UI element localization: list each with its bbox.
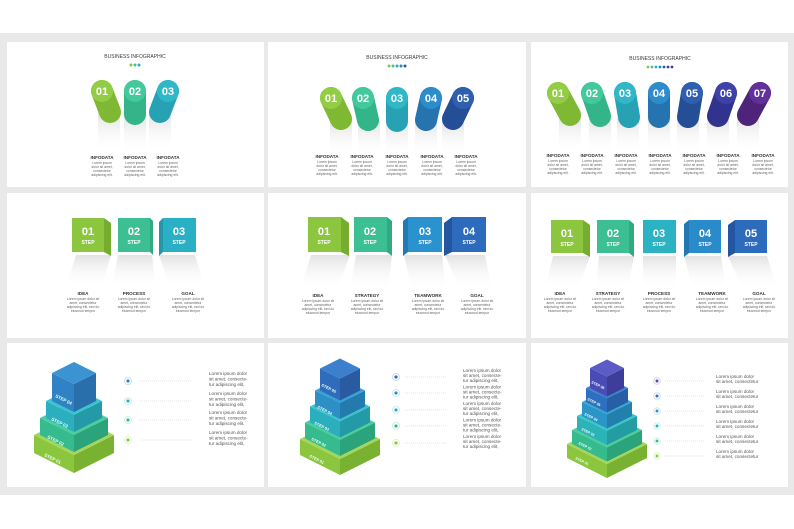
- pyramid: STEP 03: [581, 427, 595, 437]
- labels: Lorem ipsum: [92, 161, 112, 165]
- cylinders: 02: [586, 88, 598, 100]
- bullet list: tur adipiscing elit,: [209, 382, 244, 387]
- labels: dolor sit amet,: [316, 164, 338, 168]
- bullet list: Lorem ipsum dolor: [716, 419, 755, 424]
- labels: [302, 293, 493, 315]
- bullet list: Lorem ipsum dolor: [209, 430, 248, 435]
- labels: consectetur: [549, 167, 568, 171]
- labels: Lorem ipsum dolor sit: [118, 297, 150, 301]
- labels: GOAL: [181, 291, 195, 296]
- labels: Lorem ipsum: [352, 160, 372, 164]
- labels: Lorem ipsum dolor sit: [696, 297, 728, 301]
- cube 03: STEP: [172, 240, 186, 246]
- dots: [388, 64, 406, 68]
- cubes: STEP: [698, 242, 712, 248]
- bullet list: sit amet, consectetur: [716, 454, 759, 459]
- labels: [90, 155, 180, 177]
- cube 04: [444, 217, 492, 290]
- bullet list: tur adipiscing elit,: [463, 378, 498, 383]
- bullet list: Lorem ipsum dolor: [716, 374, 755, 379]
- cubes: STEP: [744, 242, 758, 248]
- cube 01: STEP: [317, 240, 331, 246]
- labels: adipiscing elit.: [316, 172, 338, 176]
- labels: dolor sit amet,: [157, 165, 179, 169]
- labels: Lorem ipsum dolor sit: [461, 299, 493, 303]
- labels: amet, consectetur: [70, 301, 97, 305]
- labels: amet, consectetur: [646, 301, 673, 305]
- labels: amet, consectetur: [175, 301, 202, 305]
- labels: consectetur: [353, 168, 372, 172]
- labels: eiusmod tempor: [465, 311, 490, 315]
- labels: consectetur: [126, 169, 145, 173]
- labels: INFODATA: [90, 155, 114, 160]
- bullet list: tur adipiscing elit,: [209, 441, 244, 446]
- bullet list: sit amet, consectetur: [716, 424, 759, 429]
- labels: TEAMWORK: [698, 291, 726, 296]
- pyramid: STEP 04: [584, 412, 598, 422]
- slide 6: 5 step cubes: [531, 193, 788, 338]
- labels: adipiscing elit, sed do: [643, 305, 675, 309]
- labels: Lorem ipsum dolor sit: [67, 297, 99, 301]
- cube 02: [350, 217, 392, 290]
- cube 02: STEP: [127, 240, 141, 246]
- cylinders: 01: [325, 93, 337, 105]
- bullet list: Lorem ipsum dolor: [209, 410, 248, 415]
- labels: adipiscing elit.: [615, 171, 637, 175]
- title: BUSINESS INFOGRAPHIC: [629, 56, 691, 62]
- labels: Lorem ipsum dolor sit: [544, 297, 576, 301]
- cylinder 01: [91, 80, 120, 153]
- labels: adipiscing elit.: [455, 172, 477, 176]
- labels: consectetur: [318, 168, 337, 172]
- labels: TEAMWORK: [414, 293, 442, 298]
- labels: consectetur: [159, 169, 178, 173]
- labels: eiusmod tempor: [306, 311, 331, 315]
- labels: INFODATA: [716, 153, 740, 158]
- labels: Lorem ipsum: [387, 160, 407, 164]
- labels: Lorem ipsum: [753, 159, 773, 163]
- labels: consectetur: [685, 167, 704, 171]
- labels: adipiscing elit.: [581, 171, 603, 175]
- labels: dolor sit amet,: [649, 163, 671, 167]
- bullet list: sit amet, consecte-: [209, 396, 248, 402]
- labels: INFODATA: [385, 154, 409, 159]
- bullet list: tur adipiscing elit,: [209, 402, 244, 407]
- labels: adipiscing elit, sed do: [118, 305, 150, 309]
- dots: [647, 66, 673, 68]
- bullet list: Lorem ipsum dolor: [463, 401, 502, 406]
- labels: eiusmod tempor: [747, 309, 772, 313]
- labels: amet, consectetur: [547, 301, 574, 305]
- labels: Lorem ipsum: [684, 159, 704, 163]
- labels: INFODATA: [420, 154, 444, 159]
- bullet list: sit amet, consectetur: [716, 394, 759, 399]
- bullet list: Lorem ipsum dolor: [463, 434, 502, 439]
- cylinders: 06: [720, 88, 732, 100]
- pyramid: STEP 02: [311, 436, 328, 448]
- labels: [544, 291, 775, 313]
- pyramid: STEP 05: [587, 397, 601, 407]
- cube 03: [403, 217, 446, 290]
- pyramid: STEP 01: [309, 453, 326, 465]
- labels: dolor sit amet,: [421, 164, 443, 168]
- cube 03: STEP: [418, 240, 432, 246]
- labels: eiusmod tempor: [416, 311, 441, 315]
- slide 1: 3 cylinders: [7, 42, 264, 187]
- bullet list: Lorem ipsum dolor: [463, 384, 502, 390]
- cubes: 02: [607, 228, 619, 240]
- bullet list: tur adipiscing elit,: [463, 411, 498, 416]
- labels: consectetur: [617, 167, 636, 171]
- labels: dolor sit amet,: [752, 163, 774, 167]
- bullet list: Lorem ipsum dolor: [209, 391, 248, 396]
- labels: Lorem ipsum: [616, 159, 636, 163]
- labels: adipiscing elit, sed do: [461, 307, 493, 311]
- labels: amet, consectetur: [464, 303, 491, 307]
- labels: consectetur: [754, 167, 773, 171]
- labels: adipiscing elit, sed do: [67, 305, 99, 309]
- slide 5: 4 step cubes: [268, 193, 526, 338]
- labels: dolor sit amet,: [717, 163, 739, 167]
- slide 7: 4-step pyramid: [7, 343, 264, 487]
- labels: Lorem ipsum dolor sit: [643, 297, 675, 301]
- labels: eiusmod tempor: [176, 309, 201, 313]
- labels: INFODATA: [751, 153, 775, 158]
- labels: IDEA: [78, 291, 89, 296]
- labels: adipiscing elit, sed do: [696, 305, 728, 309]
- labels: adipiscing elit, sed do: [351, 307, 383, 311]
- slide 3: 7 cylinders: [531, 42, 788, 187]
- labels: INFODATA: [682, 153, 706, 158]
- bullet list: sit amet, consecte-: [463, 390, 502, 394]
- pyramid: STEP 04: [317, 404, 334, 416]
- cylinders: 05: [457, 93, 469, 105]
- labels: eiusmod tempor: [122, 309, 147, 313]
- cubes: 04: [699, 228, 712, 240]
- labels: adipiscing elit, sed do: [544, 305, 576, 309]
- labels: Lorem ipsum: [548, 159, 568, 163]
- labels: PROCESS: [648, 291, 670, 296]
- labels: adipiscing elit.: [717, 171, 739, 175]
- labels: adipiscing elit.: [752, 171, 774, 175]
- labels: amet, consectetur: [121, 301, 148, 305]
- labels: dolor sit amet,: [683, 163, 705, 167]
- labels: eiusmod tempor: [700, 309, 725, 313]
- labels: dolor sit amet,: [91, 165, 113, 169]
- cubes: 03: [653, 228, 665, 240]
- labels: [315, 154, 478, 176]
- labels: Lorem ipsum: [125, 161, 145, 165]
- labels: amet, consectetur: [415, 303, 442, 307]
- bullet list: [124, 371, 248, 446]
- labels: amet, consectetur: [354, 303, 381, 307]
- labels: dolor sit amet,: [386, 164, 408, 168]
- labels: INFODATA: [123, 155, 147, 160]
- labels: Lorem ipsum: [158, 161, 178, 165]
- cylinders: [547, 82, 771, 154]
- cylinders: 03: [391, 93, 403, 105]
- labels: adipiscing elit.: [547, 171, 569, 175]
- bullet list: sit amet, consectetur: [716, 439, 759, 444]
- labels: INFODATA: [156, 155, 180, 160]
- labels: eiusmod tempor: [71, 309, 96, 313]
- labels: dolor sit amet,: [615, 163, 637, 167]
- labels: adipiscing elit.: [157, 173, 179, 177]
- bullet list: [654, 374, 759, 459]
- labels: dolor sit amet,: [547, 163, 569, 167]
- cubes: STEP: [652, 242, 666, 248]
- labels: amet, consectetur: [595, 301, 622, 305]
- labels: Lorem ipsum: [582, 159, 602, 163]
- slide 8: 5-step pyramid: [268, 343, 526, 487]
- cube 04: STEP: [462, 240, 476, 246]
- bullet list: Lorem ipsum dolor: [716, 449, 755, 454]
- pyramid: STEP 01: [44, 452, 62, 465]
- bullet list: sit amet, consecte-: [209, 436, 248, 440]
- bullet list: tur adipiscing elit,: [463, 428, 498, 432]
- bullet list: sit amet, consecte-: [463, 439, 502, 444]
- labels: Lorem ipsum: [422, 160, 442, 164]
- labels: STRATEGY: [596, 291, 620, 296]
- cube 01: [66, 218, 111, 288]
- labels: dolor sit amet,: [351, 164, 373, 168]
- cube 01: STEP: [81, 240, 95, 246]
- cube 04: 04: [463, 226, 476, 238]
- pyramid: STEP 01: [575, 456, 589, 466]
- bullet list: sit amet, consecte-: [209, 376, 248, 382]
- labels: [67, 291, 204, 313]
- slide 2: 5 cylinders: [268, 42, 526, 187]
- cylinders: 04: [425, 93, 438, 105]
- labels: consectetur: [423, 168, 442, 172]
- labels: STRATEGY: [355, 293, 379, 298]
- dots: [130, 64, 140, 66]
- labels: GOAL: [470, 293, 484, 298]
- labels: Lorem ipsum dolor sit: [172, 297, 204, 301]
- labels: adipiscing elit.: [351, 172, 373, 176]
- slide 4: 3 step cubes: [7, 193, 264, 338]
- pyramid: STEP 03: [51, 416, 69, 429]
- labels: adipiscing elit, sed do: [302, 307, 334, 311]
- bullet list: tur adipiscing elit,: [209, 421, 244, 426]
- labels: adipiscing elit, sed do: [743, 305, 775, 309]
- labels: Lorem ipsum: [456, 160, 476, 164]
- cylinder 03: [149, 80, 179, 153]
- title: BUSINESS INFOGRAPHIC: [366, 55, 428, 61]
- labels: consectetur: [93, 169, 112, 173]
- labels: INFODATA: [315, 154, 339, 159]
- cylinder 03: 03: [162, 86, 174, 98]
- pyramid: STEP 04: [55, 393, 73, 406]
- cylinders: 04: [653, 88, 666, 100]
- cylinders: 01: [552, 88, 564, 100]
- labels: dolor sit amet,: [455, 164, 477, 168]
- cylinders: 05: [686, 88, 698, 100]
- bullet list: Lorem ipsum dolor: [463, 368, 502, 373]
- cube 02: 02: [128, 226, 140, 238]
- cube 01: 01: [82, 226, 94, 238]
- labels: adipiscing elit, sed do: [172, 305, 204, 309]
- bullet list: sit amet, consectetur: [716, 379, 759, 384]
- title: BUSINESS INFOGRAPHIC: [104, 54, 166, 60]
- cylinders: 02: [357, 93, 369, 105]
- pyramid: [567, 360, 647, 478]
- labels: adipiscing elit.: [386, 172, 408, 176]
- labels: consectetur: [388, 168, 407, 172]
- cube 03: 03: [419, 226, 431, 238]
- labels: PROCESS: [123, 291, 145, 296]
- labels: amet, consectetur: [699, 301, 726, 305]
- bullet list: Lorem ipsum dolor: [463, 418, 502, 422]
- labels: INFODATA: [350, 154, 374, 159]
- labels: INFODATA: [648, 153, 672, 158]
- labels: consectetur: [583, 167, 602, 171]
- bullet list: sit amet, consectetur: [716, 409, 759, 414]
- labels: Lorem ipsum dolor sit: [351, 299, 383, 303]
- labels: eiusmod tempor: [548, 309, 573, 313]
- bullet list: Lorem ipsum dolor: [716, 434, 755, 439]
- bullet list: Lorem ipsum dolor: [209, 371, 248, 376]
- slide 9: 6-step pyramid: [531, 343, 788, 487]
- cylinders: 07: [754, 88, 766, 100]
- labels: INFODATA: [546, 153, 570, 158]
- cylinders: 03: [619, 88, 631, 100]
- labels: [546, 153, 775, 175]
- bullet list: sit amet, consecte-: [463, 373, 502, 378]
- bullet list: sit amet, consecte-: [463, 422, 502, 428]
- labels: adipiscing elit, sed do: [592, 305, 624, 309]
- bullet list: tur adipiscing elit,: [463, 444, 498, 449]
- bullet list: tur adipiscing elit,: [463, 394, 498, 400]
- pyramid: STEP 06: [591, 380, 605, 390]
- cylinders: [320, 87, 474, 158]
- cylinder 02: [124, 80, 146, 155]
- labels: dolor sit amet,: [581, 163, 603, 167]
- labels: amet, consectetur: [746, 301, 773, 305]
- cubes: STEP: [560, 242, 574, 248]
- labels: adipiscing elit.: [124, 173, 146, 177]
- labels: consectetur: [457, 168, 476, 172]
- pyramid: STEP 02: [47, 434, 65, 447]
- bullet list: sit amet, consecte-: [209, 416, 248, 420]
- labels: eiusmod tempor: [647, 309, 672, 313]
- cube 03: [159, 218, 205, 288]
- cubes: STEP: [606, 242, 620, 248]
- labels: IDEA: [555, 291, 566, 296]
- labels: consectetur: [719, 167, 738, 171]
- pyramid: STEP 02: [578, 441, 592, 451]
- cubes: 01: [561, 228, 573, 240]
- labels: adipiscing elit.: [421, 172, 443, 176]
- labels: Lorem ipsum dolor sit: [412, 299, 444, 303]
- pyramid: STEP 03: [314, 420, 331, 432]
- bullet list: sit amet, consecte-: [463, 406, 502, 411]
- cube 02: STEP: [363, 240, 377, 246]
- bullet list: Lorem ipsum dolor: [716, 404, 755, 409]
- labels: adipiscing elit.: [649, 171, 671, 175]
- cube 01: 01: [318, 226, 330, 238]
- cube 01: [300, 217, 350, 290]
- cubes: [545, 220, 777, 289]
- labels: Lorem ipsum: [650, 159, 670, 163]
- cylinder 02: 02: [129, 86, 141, 98]
- labels: Lorem ipsum dolor sit: [743, 297, 775, 301]
- labels: dolor sit amet,: [124, 165, 146, 169]
- cube 03: 03: [173, 226, 185, 238]
- labels: IDEA: [313, 293, 324, 298]
- pyramid: [34, 362, 114, 473]
- cube 02: [112, 218, 156, 288]
- cube 02: 02: [364, 226, 376, 238]
- cylinder 01: 01: [96, 86, 108, 98]
- labels: adipiscing elit, sed do: [412, 307, 444, 311]
- labels: GOAL: [752, 291, 766, 296]
- labels: INFODATA: [614, 153, 638, 158]
- labels: adipiscing elit.: [91, 173, 113, 177]
- labels: Lorem ipsum dolor sit: [592, 297, 624, 301]
- labels: Lorem ipsum: [718, 159, 738, 163]
- labels: eiusmod tempor: [355, 311, 380, 315]
- labels: Lorem ipsum: [317, 160, 337, 164]
- bullet list: Lorem ipsum dolor: [716, 389, 755, 394]
- labels: INFODATA: [580, 153, 604, 158]
- labels: consectetur: [651, 167, 670, 171]
- labels: eiusmod tempor: [596, 309, 621, 313]
- pyramid: STEP 05: [321, 382, 338, 394]
- cubes: 05: [745, 228, 757, 240]
- labels: Lorem ipsum dolor sit: [302, 299, 334, 303]
- pyramid: [300, 358, 380, 475]
- bullet list: [392, 368, 502, 449]
- labels: amet, consectetur: [305, 303, 332, 307]
- labels: adipiscing elit.: [683, 171, 705, 175]
- labels: INFODATA: [454, 154, 478, 159]
